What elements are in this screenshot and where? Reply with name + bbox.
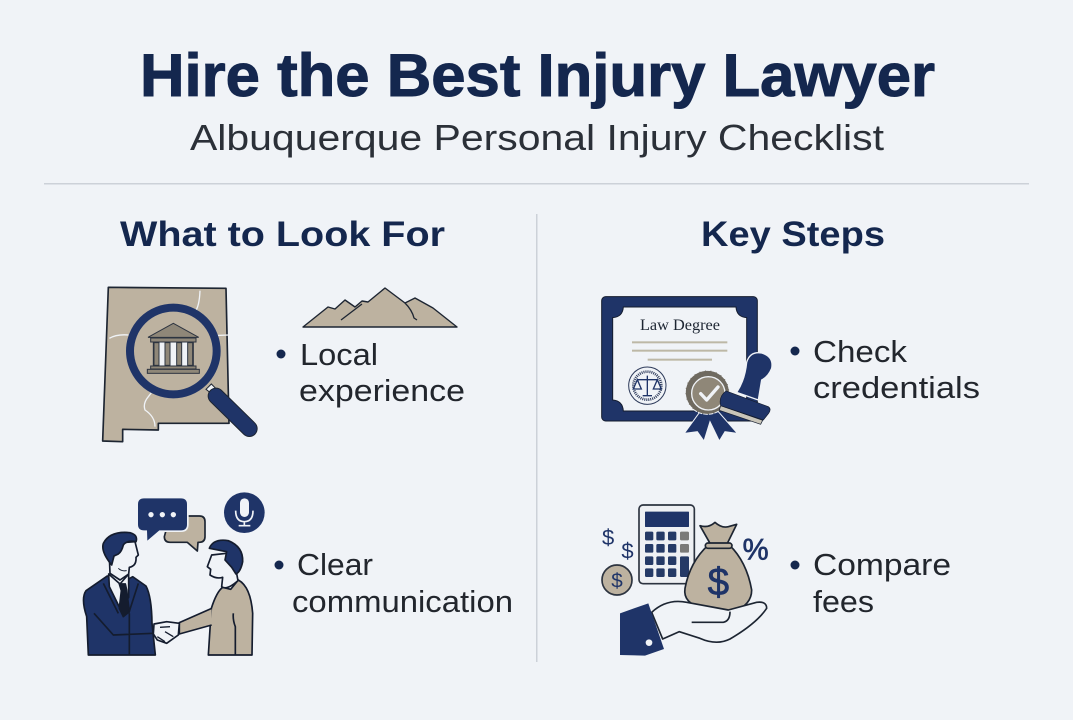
icon: microphone [224, 492, 265, 533]
bullet: local experience: experience [299, 373, 465, 408]
icon: New Mexico map with magnifier [103, 287, 249, 442]
bullet: compare fees: fees [813, 584, 874, 619]
icon: rubber stamp [719, 353, 772, 424]
bullet: check credentials [790, 334, 980, 405]
certificate title: Law Degree [640, 317, 720, 334]
subtitle: Albuquerque Personal Injury Checklist [190, 117, 884, 158]
bullet: clear communication [274, 547, 513, 619]
icon: handshake [153, 622, 179, 643]
heading: key steps: Key Steps [701, 215, 885, 254]
dollar signs: $ [602, 525, 614, 550]
bullet: clear communication: communication [292, 584, 513, 619]
icon: coin [602, 565, 632, 595]
icon: scales seal [629, 367, 666, 404]
icon: coin: $ [611, 570, 623, 593]
icon: tan speech bubble [164, 516, 205, 551]
icon: calculator [639, 505, 694, 584]
icon: mountains [303, 288, 457, 327]
figure: client in sweater [179, 540, 253, 655]
icon: ribbon rosette [684, 370, 737, 441]
dollar sign small: $ [621, 538, 634, 563]
bullet: check credentials: credentials [813, 370, 980, 405]
bullet: compare fees [790, 547, 951, 619]
icon: law degree certificate [602, 297, 772, 441]
bullet: compare fees: Compare [813, 547, 951, 582]
title: Hire the Best Injury Lawyer [140, 42, 935, 109]
icon: calculator, money bag and hand [602, 505, 769, 656]
heading: what to look for: What to Look For [120, 215, 445, 254]
icon: open hand with cuff [620, 601, 767, 656]
icon: money bag [685, 522, 752, 612]
percent sign: % [743, 534, 769, 567]
icon: client and lawyer conversation [83, 492, 265, 655]
bullet: check credentials: Check [813, 334, 908, 369]
icon: navy speech bubble [138, 498, 187, 541]
bullet: local experience: Local [300, 337, 378, 372]
figure: lawyer in suit [83, 532, 155, 655]
icon: courthouse [147, 323, 199, 373]
icon: money bag: $ [708, 561, 729, 604]
bullet: local experience [276, 337, 465, 408]
bullet: clear communication: Clear [297, 547, 373, 582]
